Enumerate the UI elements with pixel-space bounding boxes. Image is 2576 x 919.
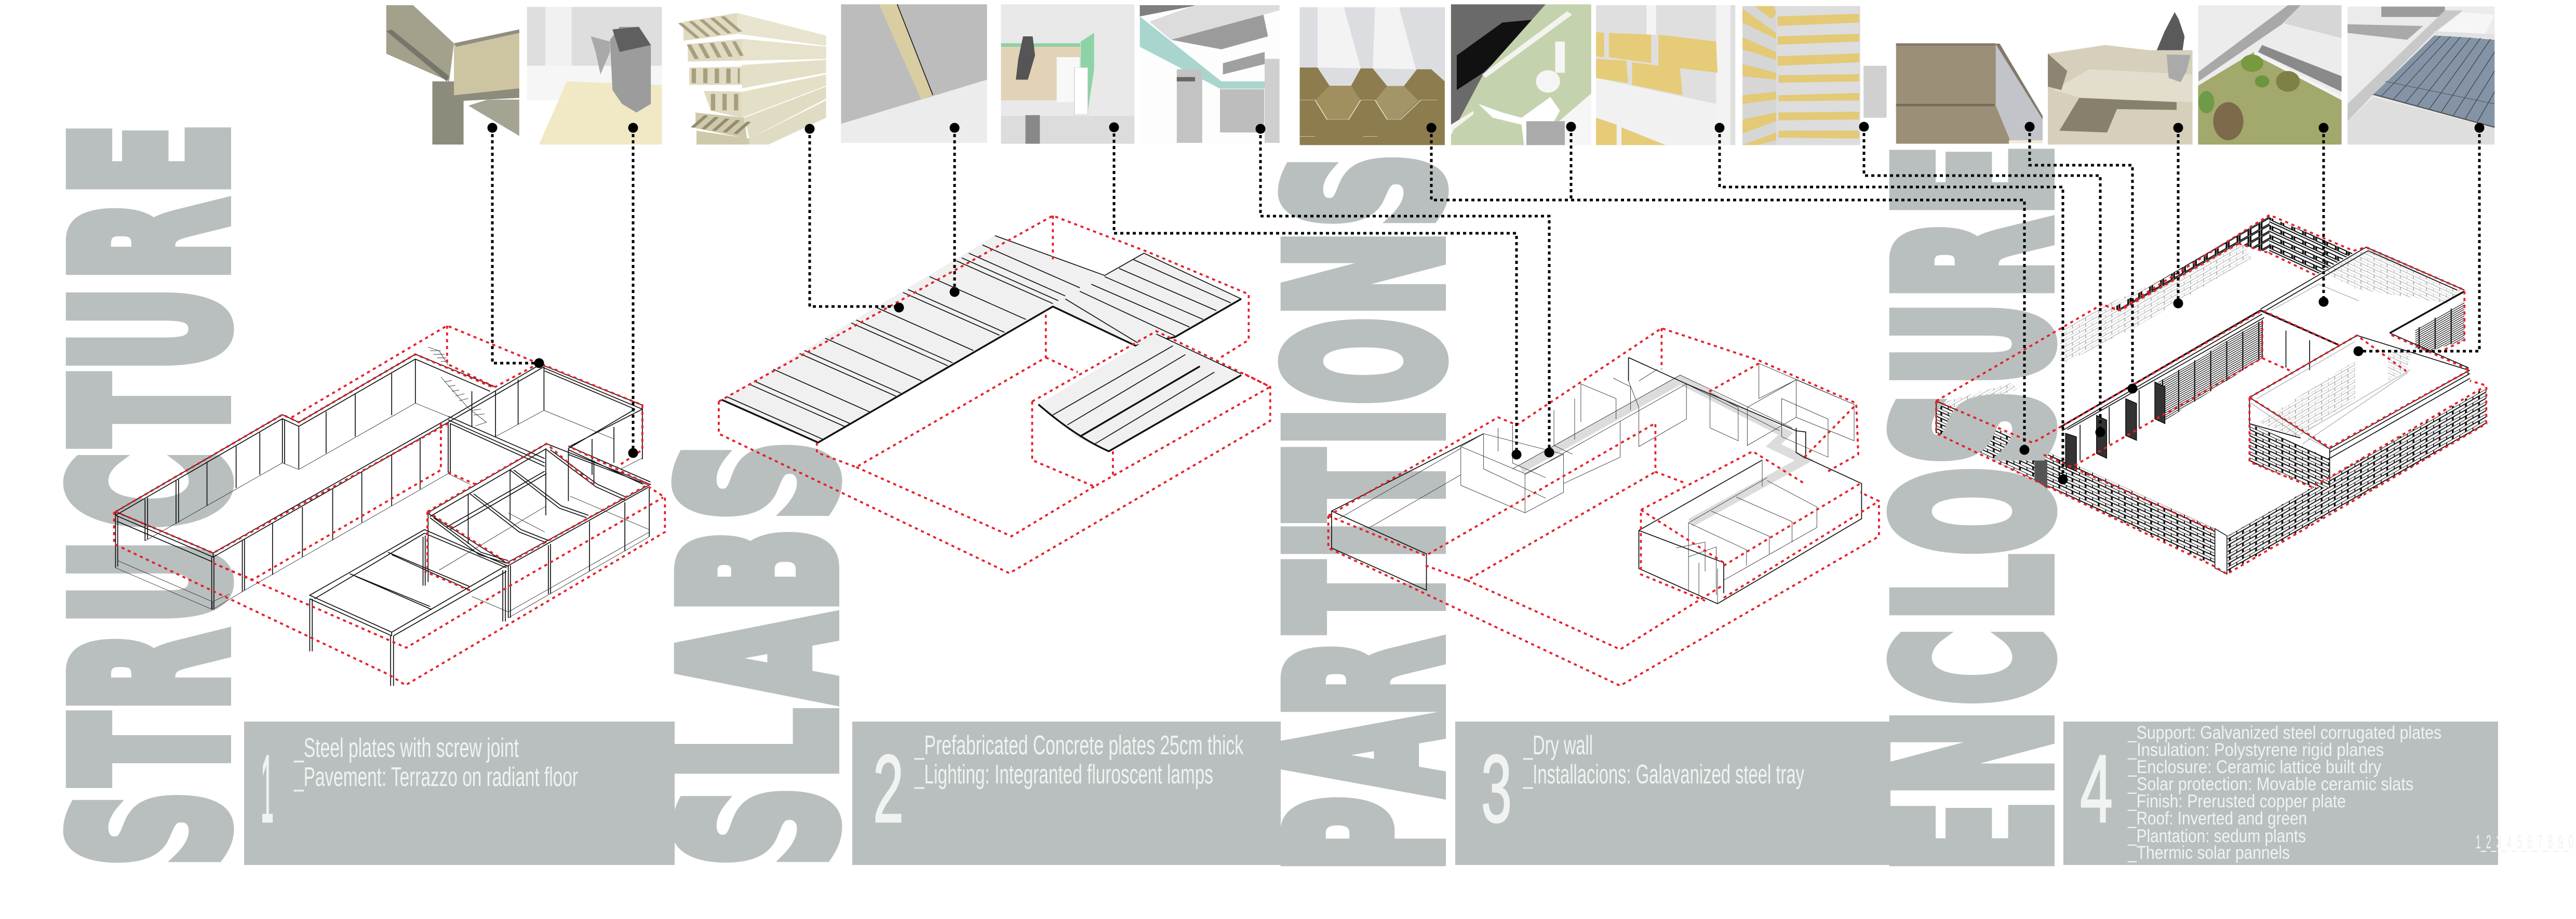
notes text: _Roof: Inverted and green — [2127, 808, 2307, 829]
dotted connectors from photos to drawings — [492, 127, 2479, 480]
notes text — [2127, 723, 2441, 863]
photo: prerusted copper plate — [1896, 43, 2043, 144]
steel tray — [1512, 375, 1804, 523]
notes text: _Solar protection: Movable ceramic slats — [2127, 774, 2413, 794]
notes text: _Lighting: Integranted fluroscent lamps — [914, 760, 1213, 790]
notes text — [914, 730, 1244, 790]
diagram: enclosure lattice walls behind the title — [1936, 244, 2251, 566]
photo: rigid insulation and worker — [2048, 12, 2193, 144]
photo: corridor with steel tray — [1140, 5, 1280, 143]
photo: ceramic lattice enclosure — [1596, 5, 1735, 145]
photo strip: third group — [1896, 5, 2494, 144]
photo strip: first group — [386, 4, 1134, 144]
notes text: _Plantation: sedum plants — [2127, 826, 2306, 846]
title: STRUCTURE: STRUCTURE — [34, 124, 270, 865]
notes text: _Dry wall — [1523, 730, 1593, 761]
photo: ceiling with integrated lamp — [841, 4, 987, 143]
title: ENCLOSURE: ENCLOSURE — [1858, 146, 2094, 871]
diagram 2: slabs axonometric — [719, 216, 1270, 573]
photo: dry wall installation — [1001, 4, 1134, 144]
panel 4: enclosure notes — [2063, 722, 2498, 865]
notes text: _Pavement: Terrazzo on radiant floor — [293, 762, 578, 792]
dry wall outlines — [1332, 357, 1861, 604]
diagram 1: structure axonometric — [114, 326, 665, 686]
red dashed footprint — [1329, 328, 1879, 686]
photo: green sedum roof — [2198, 5, 2342, 144]
dark solar protection panels — [2065, 382, 2165, 471]
panel 1: structure notes: 1 — [261, 736, 274, 843]
notes text — [1523, 730, 1804, 790]
photo: movable ceramic slats — [1742, 6, 1887, 145]
title: PARTITIONS: PARTITIONS — [1249, 154, 1485, 871]
notes text: _Insulation: Polystyrene rigid planes — [2127, 740, 2384, 760]
notes text: _Thermic solar pannels — [2127, 843, 2290, 863]
roof edge beams — [1936, 247, 2470, 488]
red dashed footprint — [114, 326, 665, 685]
connector end dots — [487, 122, 2485, 484]
diagram 3: partitions axonometric — [1329, 328, 1879, 686]
number 4: 4 — [2080, 736, 2113, 843]
notes text: _Prefabricated Concrete plates 25cm thick — [914, 730, 1244, 761]
structural frame lines — [115, 347, 650, 686]
panel 3: partitions notes — [1455, 722, 1890, 865]
notes text: _Finish: Prerusted copper plate — [2127, 791, 2346, 811]
red dashed outline — [1936, 215, 2486, 574]
photo: steel beam joint — [386, 5, 519, 144]
notes text: _Steel plates with screw joint — [293, 733, 519, 763]
title: SLABS: SLABS — [642, 442, 878, 865]
slab plates main wing — [722, 236, 1241, 443]
photo: terrazzo worker — [527, 7, 662, 144]
ceramic lattice walls — [2111, 216, 2486, 574]
red dashed footprint — [719, 216, 1270, 573]
panel 1: structure notes — [244, 722, 675, 865]
notes text: _Support: Galvanized steel corrugated plates — [2127, 723, 2441, 743]
notes text: _Installacions: Galavanized steel tray — [1523, 760, 1804, 790]
diagram 4: enclosure axonometric — [1936, 215, 2486, 574]
number 3: 3 — [1481, 736, 1512, 843]
slab plates lower wing — [1038, 334, 1241, 451]
number 2: 2 — [873, 736, 904, 843]
photo: corrugated steel plates — [1300, 7, 1445, 145]
panel 2: slabs notes — [852, 722, 1281, 865]
photo: insulation panel worker — [1451, 4, 1591, 145]
notes text: _Enclosure: Ceramic lattice built dry — [2127, 757, 2381, 777]
photo strip: second group — [1140, 4, 1887, 145]
photo: thermic solar panels — [2347, 7, 2494, 144]
notes text — [293, 733, 578, 792]
photo: prefabricated hollow concrete plates — [683, 13, 826, 144]
